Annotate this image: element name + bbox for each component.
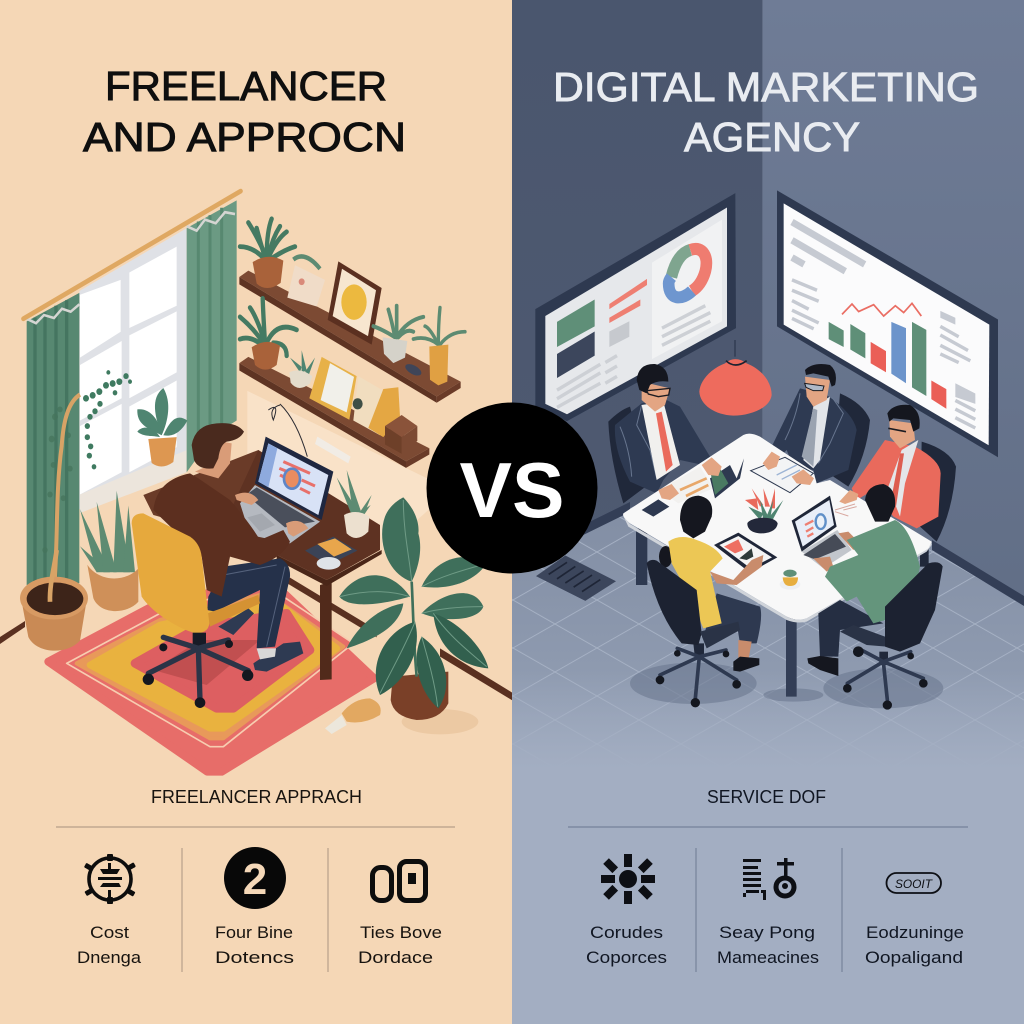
label: corudes: Corudes <box>590 923 663 942</box>
screen: left dashboard <box>535 193 736 421</box>
window <box>79 228 187 513</box>
person: legs and shoes <box>207 558 303 672</box>
label: four bine <box>215 923 294 967</box>
title: agency: AGENCY <box>684 114 860 160</box>
floor shadow beside pot <box>402 709 478 734</box>
pot: snake plant <box>80 491 138 611</box>
heading: freelancer approach: FREELANCER APPRACH <box>151 787 362 807</box>
floor vent <box>536 555 616 601</box>
illustration: freelancer at desk <box>132 404 513 734</box>
label: ties bove: Dordace <box>358 948 433 967</box>
plant: tall bamboo with ivy <box>42 370 132 600</box>
label: eodzuninge: Oopaligand <box>865 948 963 967</box>
papers and folder <box>659 458 744 503</box>
chair base and wheels <box>143 633 253 708</box>
pendant lamp <box>699 340 772 416</box>
laptop <box>240 437 333 543</box>
plant: upper shelf pot <box>240 219 295 288</box>
hands on table <box>658 452 858 504</box>
baseboards <box>512 502 1024 606</box>
label: corudes <box>586 923 667 967</box>
pot: bamboo planter <box>20 550 88 651</box>
tablet on table <box>714 533 777 573</box>
laptop on table <box>792 496 852 568</box>
person: top suit <box>772 364 870 487</box>
centre plant <box>745 488 783 533</box>
stacked boxes <box>385 415 417 454</box>
chair seat <box>207 595 260 627</box>
label: ties bove: Ties Bove <box>360 923 442 942</box>
small plant in white pot <box>289 350 315 388</box>
curtain rod <box>23 191 241 319</box>
document on table <box>751 457 813 493</box>
person: left suit <box>608 364 710 503</box>
desk <box>143 450 382 680</box>
baseboard <box>0 621 25 644</box>
label: four bine: Four Bine <box>215 923 293 942</box>
framed yellow circle picture <box>328 261 382 345</box>
label: eodzuninge <box>865 923 964 967</box>
wall: left <box>512 0 763 593</box>
book display <box>309 357 400 437</box>
label: corudes: Coporces <box>586 948 667 967</box>
panel: agency background <box>512 0 1024 1024</box>
title: freelancer <box>83 63 406 160</box>
vs badge <box>426 402 598 574</box>
icon: list and target <box>743 858 794 900</box>
person: yellow shirt with chair <box>647 496 763 707</box>
small picture card <box>287 256 325 307</box>
heading: service: SERVICE DOF <box>707 787 826 807</box>
icon: number two badge <box>224 847 286 909</box>
person: green shirt with chair <box>807 484 943 710</box>
title: agency: DIGITAL MARKETING <box>553 64 979 110</box>
wall switch <box>315 437 351 463</box>
icon: sun burst <box>601 854 655 904</box>
title: freelancer: AND APPROCN <box>83 114 406 160</box>
lamp cord <box>268 404 307 457</box>
floor brush <box>325 698 381 734</box>
table <box>623 434 932 697</box>
chair back <box>132 513 209 633</box>
plants: upper shelf right <box>373 306 465 385</box>
label: cost: Dnenga <box>77 948 142 967</box>
label: seay pong: Mameacines <box>717 948 819 967</box>
wall: right <box>763 0 1024 621</box>
label: seay pong: Seay Pong <box>719 923 815 942</box>
floor <box>512 442 1024 790</box>
label: cost <box>77 923 142 967</box>
floor shadows <box>630 663 943 708</box>
panel: freelancer background <box>0 0 512 1024</box>
desk tablet and mouse <box>305 537 357 570</box>
desk plant <box>337 470 372 538</box>
icon: pill badge: SOOIT <box>895 879 933 891</box>
icon: rounded blocks <box>372 862 426 900</box>
curtain: right <box>187 200 237 472</box>
label: ties bove <box>358 923 442 967</box>
label: eodzuninge: Eodzuninge <box>866 923 964 942</box>
label: seay pong <box>717 923 819 967</box>
large monstera plant <box>339 497 488 720</box>
icon: number two badge: 2 <box>243 855 267 904</box>
illustration: freelancer window wall and shelves <box>0 191 465 651</box>
title: agency <box>553 64 979 160</box>
plant on window sill <box>137 388 187 466</box>
baseboards <box>288 577 513 701</box>
icon: pill badge <box>886 873 941 893</box>
person: right coral jacket <box>852 405 956 542</box>
paper near right person <box>835 504 857 516</box>
plant: lower shelf pot <box>240 298 297 370</box>
person: head and hair <box>192 423 244 478</box>
donut chart <box>669 249 706 297</box>
wall highlight <box>247 391 433 550</box>
shelf: lower <box>239 357 429 468</box>
label: four bine: Dotencs <box>215 948 294 967</box>
cup and saucer <box>780 570 800 590</box>
label: cost: Cost <box>90 923 129 942</box>
phone on table <box>642 499 669 517</box>
illustration: agency walls and screens <box>512 0 1024 621</box>
vs text: VS <box>460 446 564 534</box>
title: freelancer: FREELANCER <box>105 63 387 109</box>
rug <box>48 580 374 772</box>
person: torso and arm <box>153 473 308 597</box>
shelf: upper <box>239 271 461 403</box>
curtain: left <box>27 293 79 585</box>
icon: cost gear <box>84 854 136 904</box>
illustration: agency meeting <box>608 340 956 710</box>
screen: right charts <box>777 190 998 457</box>
